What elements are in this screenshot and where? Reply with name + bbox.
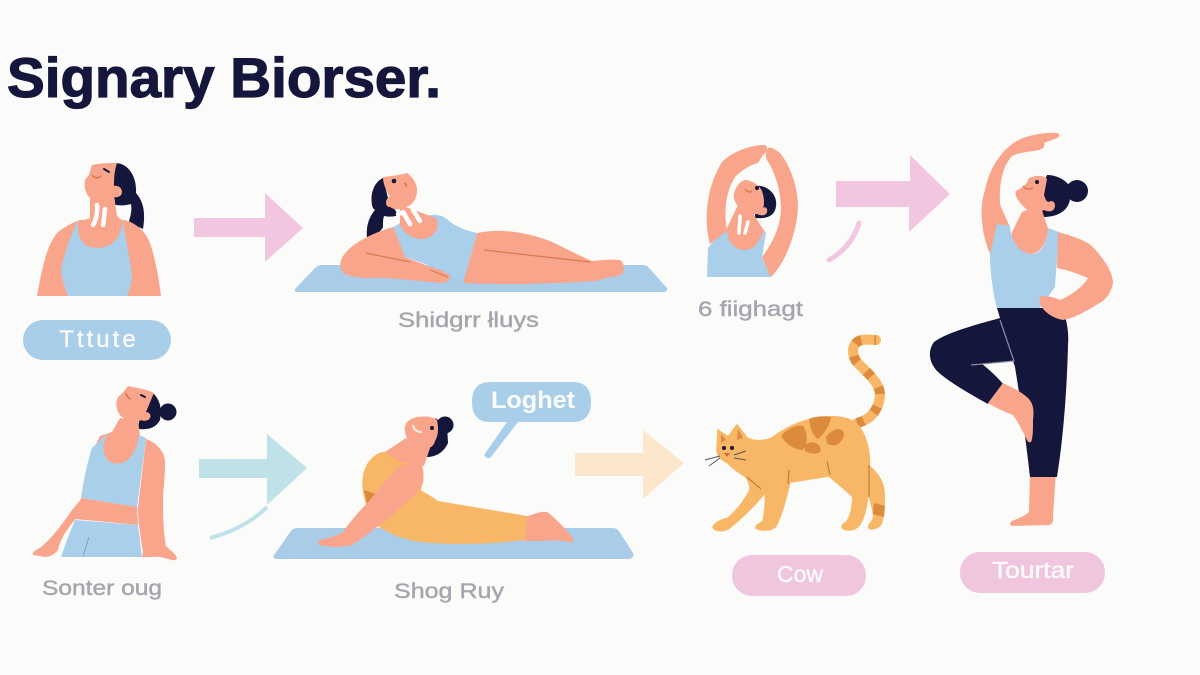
left arm [33,498,82,557]
neck and shoulder [385,438,430,466]
bent leg calf and foot [988,383,1033,442]
leg [463,231,624,284]
neck stretch highlights [739,216,748,233]
leg fold [484,250,590,262]
shorts [61,520,142,557]
chest and neck [725,205,765,252]
neck [400,205,438,239]
leggings [930,308,1068,477]
title: Signary Biorser. [7,46,441,109]
neck and shoulders [92,418,140,468]
arrow: peach [575,430,684,499]
tank top [392,215,477,283]
whiskers [705,451,746,466]
cat body lines [747,461,869,497]
head [383,173,417,209]
pill: cat label: Cow [777,561,823,587]
eye [141,395,145,397]
head [734,180,767,215]
smile [413,425,422,432]
eye [1035,180,1039,184]
label: arms overhead stretch: 6 fiighagt [698,298,803,321]
face details [92,175,101,178]
arms and shoulders [37,220,161,296]
arm [318,462,424,547]
hair bun [436,416,454,434]
arrow tail: pink curve [829,223,859,260]
hair [138,393,161,429]
figure: reclined stretch on mat [295,173,667,292]
hair [755,186,776,218]
neck and chest [1012,205,1048,254]
neck [78,195,124,250]
label: reclined stretch: Shidgrr łluys [398,309,539,332]
top shadow [364,490,376,505]
smile [1023,186,1033,189]
pill: step one label [23,320,171,360]
raised arm [982,133,1059,254]
back leg stripe [873,503,885,517]
left arm [707,145,767,244]
head [405,416,438,449]
neck stretch highlights [93,205,105,225]
illustration: cat [705,340,885,531]
yoga mat [274,528,634,559]
figure: arms overhead stretch [707,145,798,277]
head [116,386,154,422]
figure: cobra pose on mat [274,416,634,559]
neck stretch highlights [398,210,420,224]
arrow: light blue [199,434,307,505]
ear inner shading [721,429,743,443]
head [1016,176,1055,212]
tail stripes [853,340,880,423]
speech bubble [472,382,591,458]
right arm [762,147,798,277]
eye [392,179,396,183]
right arm [138,439,177,560]
speech bubble: Loghet [491,387,575,414]
pill: cat label [732,555,866,596]
hair bun [1066,180,1088,202]
leggings seam [971,320,1014,365]
arrow: pink upper right [836,155,950,232]
cat eyes [724,446,732,450]
orange leggings [378,490,527,544]
propped arm [340,227,450,283]
smile [745,189,752,192]
foot [525,512,573,542]
smile [404,183,407,186]
smile [126,393,131,399]
tank top [61,220,132,296]
tank top [707,231,771,277]
label: cobra pose: Shog Ruy [394,580,505,603]
eye [755,186,759,190]
arm fold [366,253,448,277]
midriff [75,498,138,525]
head [85,163,122,202]
arrow: pink step one [194,193,303,262]
orange top [362,452,423,515]
ponytail hair [110,163,144,229]
tail [853,340,880,423]
sports top [81,433,146,507]
pill: tree pose label [960,552,1105,593]
label: seated neck stretch: Sonter oug [42,577,162,600]
figure: tree pose [930,133,1113,526]
body [713,417,870,531]
bent arm [1040,232,1113,320]
standing leg skin [1010,470,1056,526]
hair [1040,175,1070,217]
cat nose [724,453,730,457]
back leg [864,465,885,530]
shorts fold [83,537,89,556]
eye [430,426,434,430]
eye [104,169,109,172]
figure: neck stretch looking up [37,163,161,296]
pill: step one label: Tttute [59,326,139,353]
arrow tail: light blue curve [210,507,267,538]
ponytail hair [367,178,398,238]
tank top [990,224,1059,308]
figure: seated neck stretch [33,386,177,560]
hair [423,418,448,457]
fur patches [781,416,844,454]
pill: tree pose label: Tourtar [992,557,1074,583]
yoga mat [295,265,667,292]
hair bun [160,404,176,420]
